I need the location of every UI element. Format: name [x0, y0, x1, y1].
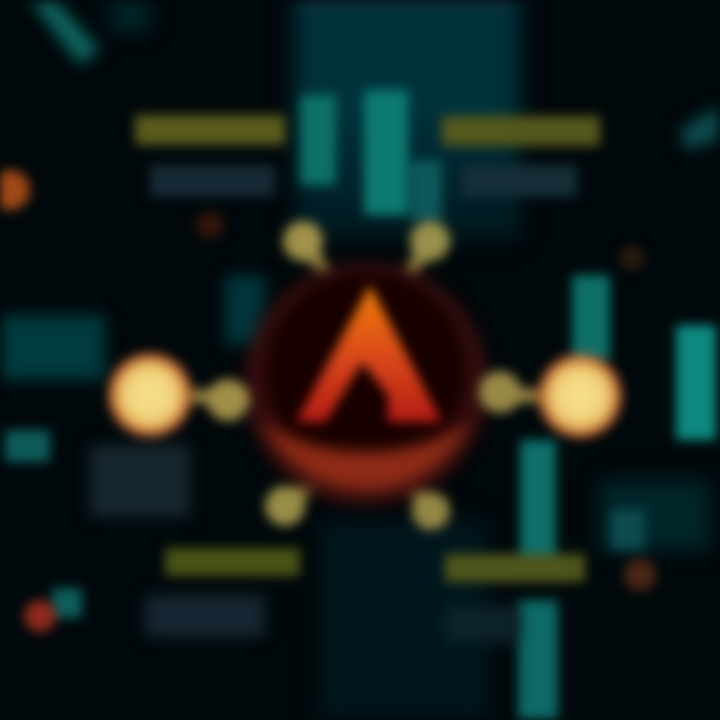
icon: left large node — [108, 353, 192, 437]
icon: top right node — [410, 221, 450, 261]
text block: bottom right — [445, 605, 520, 643]
icon: bottom left node — [265, 486, 305, 526]
panel: left grey block — [90, 445, 190, 517]
small orange accents — [0, 170, 656, 632]
icon: right large node — [538, 354, 622, 438]
heading: top right — [442, 116, 600, 197]
central emblem — [244, 262, 488, 506]
icon: inner left node — [207, 379, 249, 421]
heading: bottom right — [445, 554, 585, 643]
text block: top left — [150, 165, 275, 197]
text block: bottom left — [145, 595, 265, 637]
icon: triangle — [296, 285, 442, 422]
icon: bottom right node — [412, 492, 450, 530]
icon: top left node — [283, 221, 323, 261]
heading: top left — [135, 115, 285, 197]
heading: bottom left — [145, 548, 300, 637]
background panels — [295, 0, 710, 720]
connector lines — [190, 243, 540, 510]
text block: top right — [462, 165, 577, 197]
icon: inner right node — [479, 371, 521, 413]
